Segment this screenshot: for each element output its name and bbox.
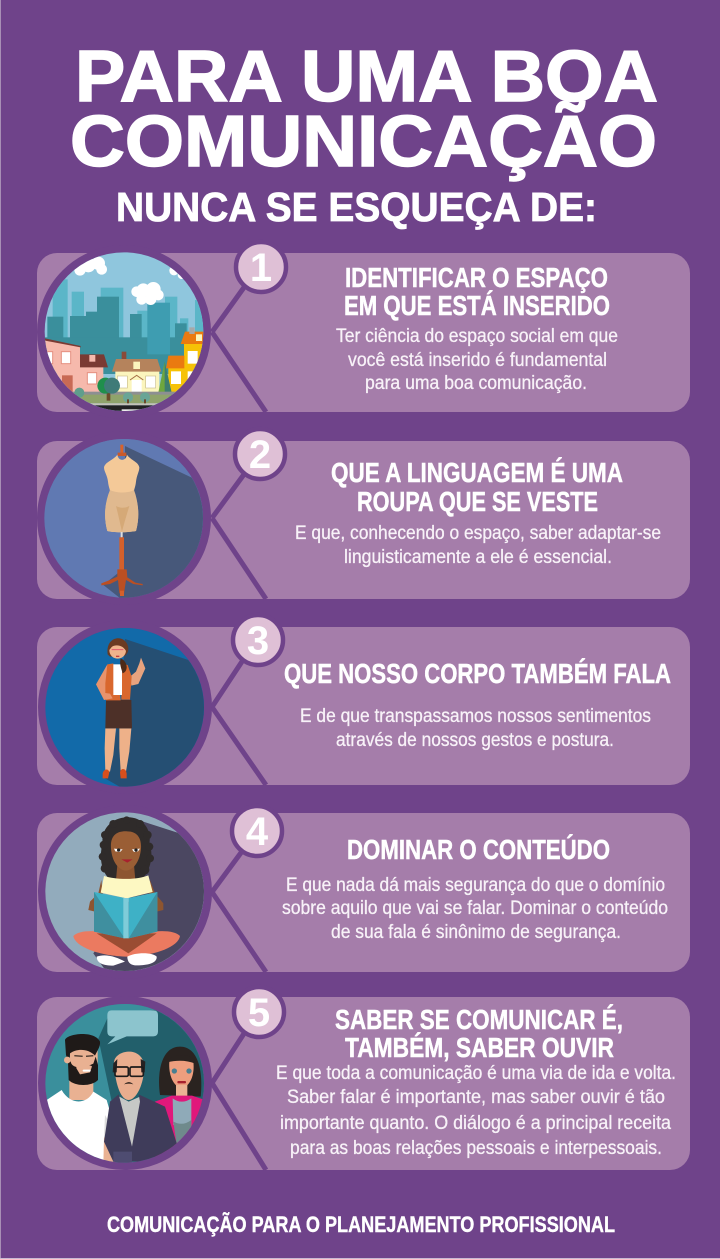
body text 3 bbox=[300, 705, 651, 751]
body text 2 bbox=[295, 522, 661, 568]
body text 2: linguisticamente a ele é essencial. bbox=[344, 546, 612, 568]
heading 1 bbox=[344, 262, 610, 321]
body text 4: E que nada dá mais segurança do que o domínio bbox=[286, 874, 665, 896]
heading 2: QUE A LINGUAGEM É UMA bbox=[331, 457, 623, 488]
number 3: 3 bbox=[247, 619, 269, 663]
panel: item 3 bbox=[37, 615, 690, 792]
panel: item 2 bbox=[37, 429, 690, 603]
subtitle: NUNCA SE ESQUEÇA DE: bbox=[116, 184, 597, 230]
illustration: city and houses bbox=[43, 250, 207, 414]
body text 3: através de nossos gestos e postura. bbox=[336, 729, 614, 751]
panel: item 1 bbox=[37, 242, 690, 415]
heading 5 bbox=[335, 1004, 623, 1063]
illustration: woman reading a book bbox=[43, 810, 210, 977]
title: PARA UMA BOA bbox=[75, 37, 658, 117]
body text 5: importante quanto. O diálogo é a principal receita bbox=[280, 1112, 671, 1134]
title: COMUNICAÇÃO bbox=[70, 101, 657, 182]
heading 2: ROUPA QUE SE VESTE bbox=[357, 486, 598, 517]
illustration: three people talking bbox=[43, 1002, 210, 1165]
heading 1: EM QUE ESTÁ INSERIDO bbox=[344, 290, 610, 321]
number 5: 5 bbox=[248, 991, 270, 1035]
illustration: woman gesturing bbox=[43, 625, 210, 792]
number 1: 1 bbox=[250, 246, 272, 290]
body text 2: E que, conhecendo o espaço, saber adaptar-se bbox=[295, 522, 661, 544]
body text 1: você está inserido é fundamental bbox=[348, 349, 607, 371]
body text 5 bbox=[276, 1062, 676, 1159]
body text 5: Saber falar é importante, mas saber ouvir é tão bbox=[287, 1086, 665, 1108]
title bbox=[70, 37, 658, 182]
heading 1: IDENTIFICAR O ESPAÇO bbox=[345, 262, 608, 293]
footer: COMUNICAÇÃO PARA O PLANEJAMENTO PROFISSIONAL bbox=[107, 1212, 615, 1237]
body text 3: E de que transpassamos nossos sentimentos bbox=[300, 705, 651, 727]
body text 1: para uma boa comunicação. bbox=[365, 372, 587, 394]
panel: item 4 bbox=[37, 806, 690, 977]
number 2: 2 bbox=[249, 433, 271, 477]
panel: item 5 bbox=[37, 987, 690, 1170]
body text 5: E que toda a comunicação é uma via de ida e volta. bbox=[276, 1062, 676, 1084]
body text 4: sobre aquilo que vai se falar. Dominar o conteúdo bbox=[282, 897, 668, 919]
body text 1: Ter ciência do espaço social em que bbox=[336, 325, 618, 347]
heading 5: TAMBÉM, SABER OUVIR bbox=[345, 1032, 614, 1063]
body text 1 bbox=[336, 325, 618, 394]
body text 5: para as boas relações pessoais e interpessoais. bbox=[290, 1137, 662, 1159]
heading 4: DOMINAR O CONTEÚDO bbox=[347, 834, 610, 865]
heading 2 bbox=[331, 457, 623, 517]
heading 5: SABER SE COMUNICAR É, bbox=[335, 1004, 623, 1035]
body text 4 bbox=[282, 874, 668, 943]
body text 4: de sua fala é sinônimo de segurança. bbox=[331, 921, 621, 943]
illustration: dress mannequin bbox=[43, 437, 210, 603]
number 4: 4 bbox=[246, 810, 269, 854]
